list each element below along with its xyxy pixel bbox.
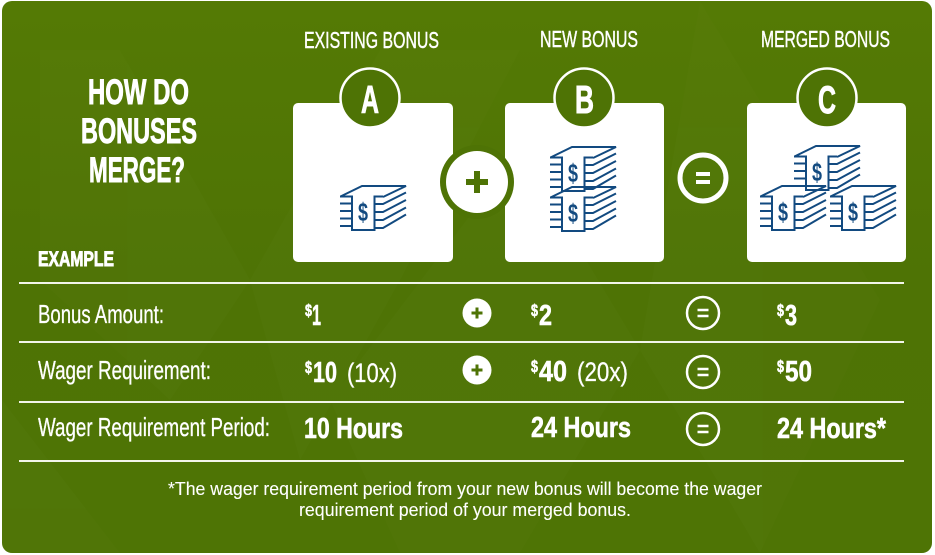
row: wager requirement period: 24 Hours* (777, 413, 887, 445)
row: wager requirement period: Wager Requirement Period: (38, 412, 270, 442)
heading: new bonus: NEW BONUS (540, 26, 638, 52)
panel: card C (747, 68, 906, 262)
footnote (168, 479, 762, 520)
row: bonus amount: $ (531, 301, 538, 320)
panel: card C: C (818, 79, 836, 122)
row: wager requirement: $ (777, 357, 784, 376)
row: bonus amount: $ (305, 301, 312, 320)
row: bonus amount: 2 (539, 300, 552, 332)
footnote: requirement period of your merged bonus. (299, 500, 631, 520)
panel: card A: A (361, 79, 379, 122)
row: wager requirement: $ (531, 357, 538, 376)
panel: card B (505, 68, 664, 262)
title: MERGE? (89, 151, 185, 190)
row: wager requirement: (20x) (577, 357, 628, 387)
icon: large plus (440, 145, 514, 219)
row: bonus amount: $ (777, 301, 784, 320)
row: wager requirement: Wager Requirement: (38, 355, 211, 385)
title: BONUSES (81, 112, 197, 151)
icon: large equals (680, 155, 726, 201)
row: wager requirement period (38, 412, 887, 445)
heading: existing bonus: EXISTING BONUS (304, 27, 439, 53)
row: wager requirement period: 10 Hours (304, 413, 403, 445)
row: wager requirement: 40 (539, 356, 567, 388)
row: wager requirement (38, 355, 812, 389)
panel: card B: B (575, 79, 594, 122)
row: bonus amount: 1 (312, 300, 321, 332)
row: wager requirement period: 24 Hours (531, 412, 631, 444)
row: bonus amount: 3 (785, 300, 797, 332)
footnote: *The wager requirement period from your new bonus will become the wager (168, 479, 762, 499)
label: example: EXAMPLE (38, 248, 114, 271)
row: wager requirement: (10x) (347, 358, 397, 388)
row: wager requirement: $ (305, 358, 312, 377)
row: bonus amount (38, 297, 797, 332)
title (81, 73, 197, 190)
row: wager requirement: 50 (785, 356, 812, 388)
panel: card A (293, 68, 453, 262)
row: bonus amount: Bonus Amount: (38, 299, 164, 329)
row: wager requirement: 10 (313, 357, 337, 389)
title: HOW DO (88, 73, 189, 112)
